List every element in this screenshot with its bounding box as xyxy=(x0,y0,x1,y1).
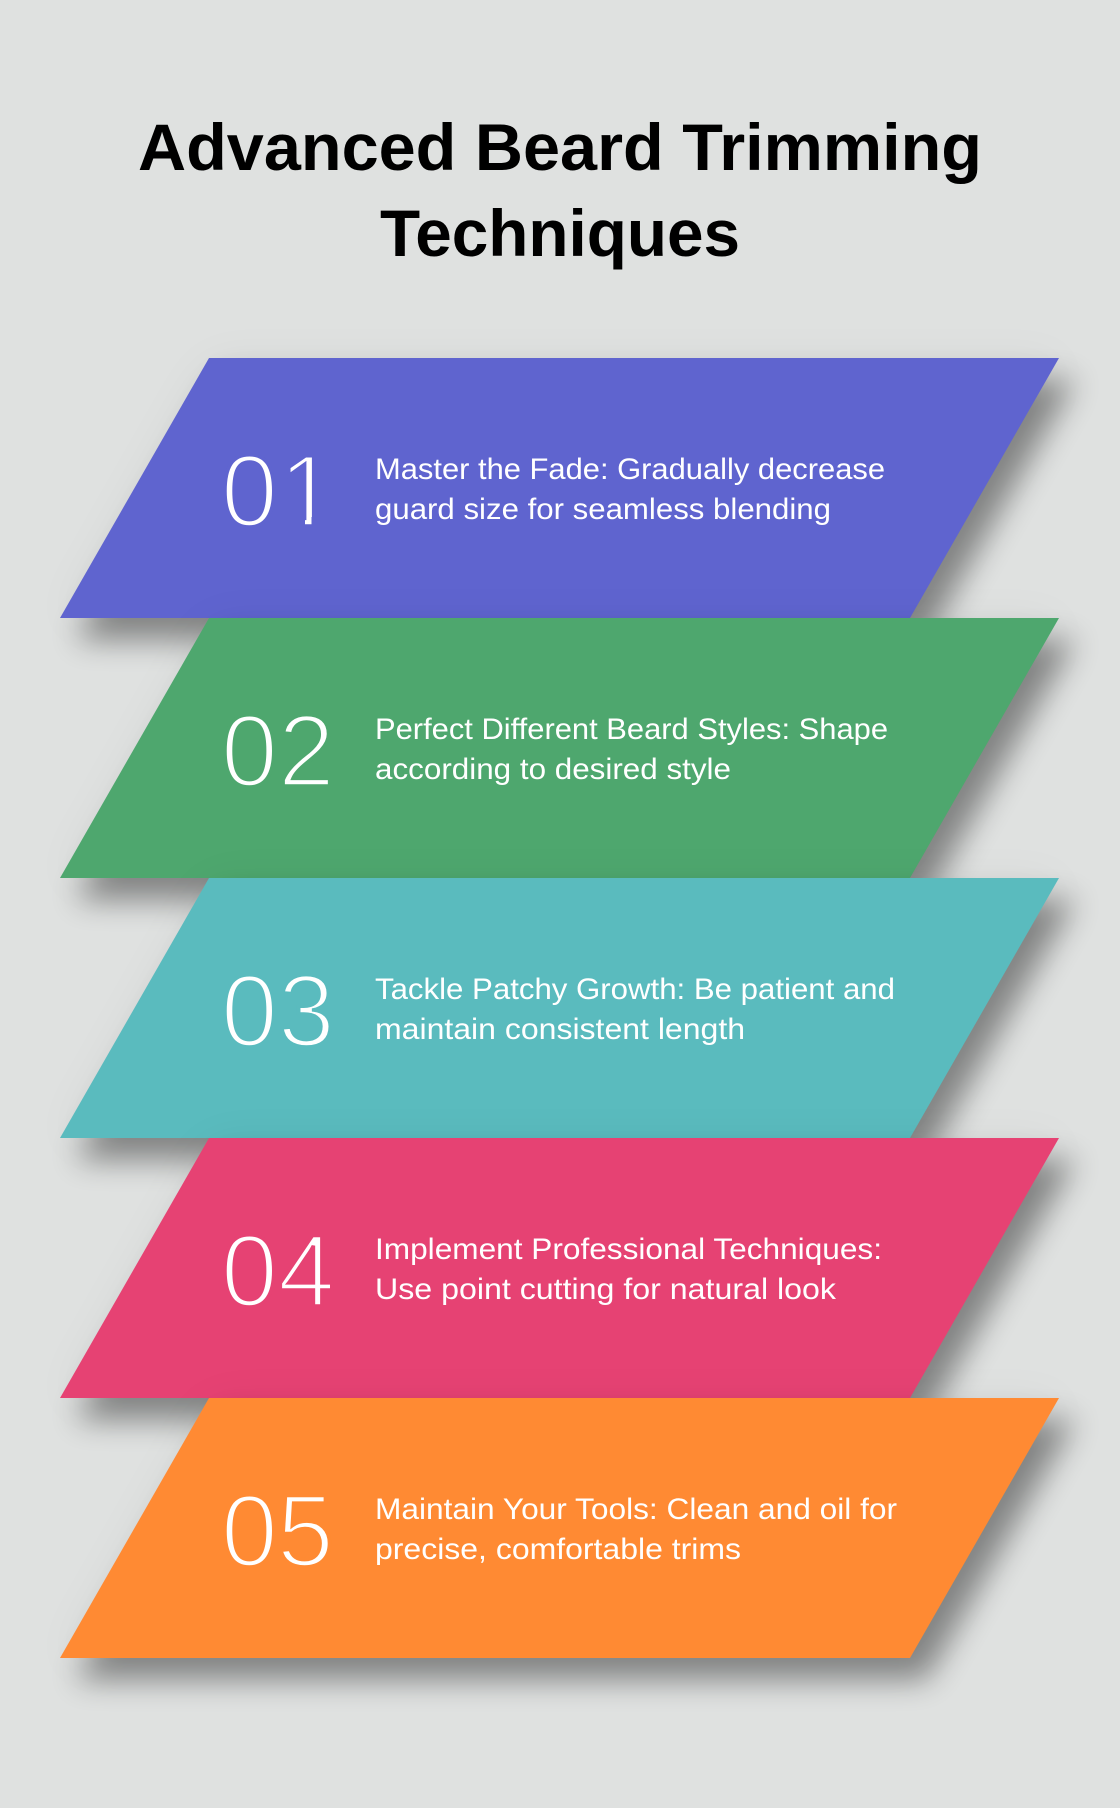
parallelogram 03 xyxy=(60,878,1059,1138)
title: Techniques xyxy=(380,196,740,270)
number 03: 03 xyxy=(221,954,335,1068)
text 02 xyxy=(375,713,888,786)
panel: step 03 xyxy=(60,878,1059,1138)
panel: step 04 xyxy=(60,1138,1059,1398)
number 04: 04 xyxy=(221,1214,335,1328)
text 03 xyxy=(375,973,895,1046)
number 05: 05 xyxy=(221,1474,334,1588)
text 03: maintain consistent length xyxy=(375,1013,745,1046)
panel: step 05 xyxy=(60,1398,1059,1658)
text 04 xyxy=(375,1233,882,1306)
text 01: guard size for seamless blending xyxy=(375,493,831,526)
text 05: Maintain Your Tools: Clean and oil for xyxy=(375,1493,897,1526)
text 03: Tackle Patchy Growth: Be patient and xyxy=(375,973,895,1006)
text 02: according to desired style xyxy=(375,753,731,786)
number 02: 02 xyxy=(221,694,335,808)
panel: step 01 xyxy=(60,358,1059,618)
parallelogram 05 xyxy=(60,1398,1059,1658)
parallelogram 02 xyxy=(60,618,1059,878)
text 05 xyxy=(375,1493,897,1566)
number 01: 01 xyxy=(221,434,336,548)
text 01 xyxy=(375,453,885,526)
panel: step 02 xyxy=(60,618,1059,878)
text 04: Use point cutting for natural look xyxy=(375,1273,837,1306)
text 01: Master the Fade: Gradually decrease xyxy=(375,453,885,486)
title xyxy=(138,110,982,270)
text 04: Implement Professional Techniques: xyxy=(375,1233,882,1266)
title: Advanced Beard Trimming xyxy=(138,110,982,184)
parallelogram 01 xyxy=(60,358,1059,618)
text 05: precise, comfortable trims xyxy=(375,1533,741,1566)
parallelogram 04 xyxy=(60,1138,1059,1398)
text 02: Perfect Different Beard Styles: Shape xyxy=(375,713,888,746)
